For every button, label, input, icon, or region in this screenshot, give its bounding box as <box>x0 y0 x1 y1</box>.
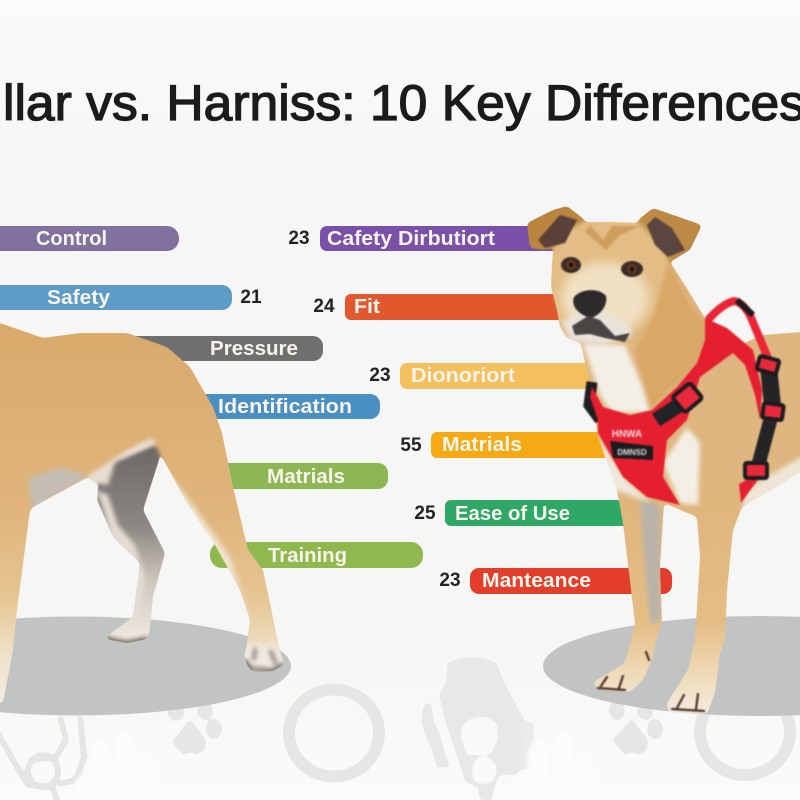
far leg pale edge <box>97 490 145 617</box>
toe marks <box>598 652 704 711</box>
black neck clip <box>589 382 600 420</box>
value: 21: 21 <box>240 287 262 308</box>
value: 55: 55 <box>400 435 422 456</box>
icon: pale paw print left <box>74 731 155 800</box>
black upper rear strap <box>768 362 773 410</box>
icon: paw print left <box>168 702 222 755</box>
strap buckle top <box>757 356 779 374</box>
ground shadow right <box>543 616 800 716</box>
watermark icons <box>0 657 790 800</box>
strap buckle low <box>745 463 767 478</box>
right ear <box>638 208 702 262</box>
far hind leg <box>97 445 165 642</box>
bar: Training <box>210 542 423 568</box>
ground shadow left <box>0 616 291 716</box>
title: llar vs. Harniss: 10 Key Differences <box>3 75 800 131</box>
bar: Fit: Fit <box>354 296 380 318</box>
icon: pale paw print right <box>512 731 593 800</box>
icon: collar ring right <box>700 689 790 775</box>
black chest strap <box>656 402 684 420</box>
bar: Identification <box>180 394 380 419</box>
bar: Manteance: Manteance <box>482 570 591 592</box>
value: 23 bottom: 23 <box>439 570 461 591</box>
bar: Safety <box>0 285 232 310</box>
front leg right <box>667 470 742 714</box>
left dog <box>0 320 285 703</box>
head <box>551 222 668 343</box>
hind paw toes <box>246 648 283 670</box>
icon: collar ring centre <box>289 690 379 776</box>
icon: buckle strip centre left <box>421 703 450 768</box>
black lower rear strap <box>757 410 773 470</box>
value: 23 top: 23 <box>288 228 310 249</box>
value: 25: 25 <box>414 503 436 524</box>
harness <box>589 300 784 505</box>
red side panel <box>739 470 765 503</box>
icon: harness silhouette centre <box>439 657 530 800</box>
bar: Identification: Identification <box>218 396 352 418</box>
harness chest badge <box>610 441 653 460</box>
body and near legs <box>0 320 283 703</box>
bar: Manteance <box>470 568 672 594</box>
bar: Dionoriort <box>400 363 610 389</box>
right ear inner <box>647 217 685 257</box>
bar: Ease of Use: Ease of Use <box>455 503 570 525</box>
bar: Control <box>0 226 179 251</box>
bar: Pressure <box>120 336 323 361</box>
bar: Pressure: Pressure <box>210 338 298 360</box>
muzzle <box>561 262 649 334</box>
bar: Cafety Dirbutiort <box>320 226 560 251</box>
eye left <box>561 257 581 273</box>
mouth <box>572 316 630 342</box>
belly pale <box>742 440 800 507</box>
bar: Control: Control <box>36 228 107 250</box>
forehead wrinkle <box>585 225 640 250</box>
bar: Matrials left <box>190 463 388 489</box>
bar: Matrials left: Matrials <box>267 466 345 488</box>
value: 23 middle: 23 <box>369 365 391 386</box>
harness chest badge: DMNSD <box>617 448 647 457</box>
hind paw near <box>244 643 285 672</box>
harness top loop <box>708 301 768 358</box>
lower white chest <box>598 437 650 503</box>
hind leg pale edge <box>173 477 250 620</box>
panel: collar bars <box>0 226 423 568</box>
bar: Matrials right: Matrials <box>442 434 522 456</box>
harness black loop end <box>737 300 753 315</box>
bar: Safety: Safety <box>47 287 111 309</box>
strap buckle mid <box>762 403 784 420</box>
belly shading <box>28 468 88 508</box>
bar: Matrials right <box>431 432 621 458</box>
right dog <box>527 206 800 714</box>
bar: Ease of Use <box>445 500 645 526</box>
left ear <box>527 206 585 250</box>
panel: harness bars <box>288 226 672 594</box>
bar: Cafety Dirbutiort: Cafety Dirbutiort <box>327 228 495 250</box>
icon: harness silhouette left <box>0 716 84 800</box>
value: 24: 24 <box>313 296 335 317</box>
icon: paw print right <box>609 700 663 755</box>
inner thigh <box>88 438 157 485</box>
neck fur <box>635 262 706 410</box>
red harness body <box>590 318 762 505</box>
nose <box>573 290 606 318</box>
lower jaw <box>562 305 632 345</box>
far paw toes <box>106 638 147 642</box>
harness chest label text: HNWA <box>612 429 642 440</box>
bar: Dionoriort: Dionoriort <box>411 365 515 387</box>
white chest bib <box>583 343 650 413</box>
left ear inner <box>538 215 577 248</box>
face details <box>538 215 685 345</box>
white foreleg patch <box>663 427 700 505</box>
body <box>580 262 800 517</box>
front leg left <box>592 490 664 692</box>
grey inner leg <box>640 500 660 625</box>
bar: Fit <box>345 294 585 320</box>
bar: Training: Training <box>268 545 347 567</box>
fur base <box>527 206 800 714</box>
icon: buckle strip centre right <box>518 722 534 770</box>
eye right <box>621 261 643 277</box>
chest buckle <box>672 383 703 413</box>
